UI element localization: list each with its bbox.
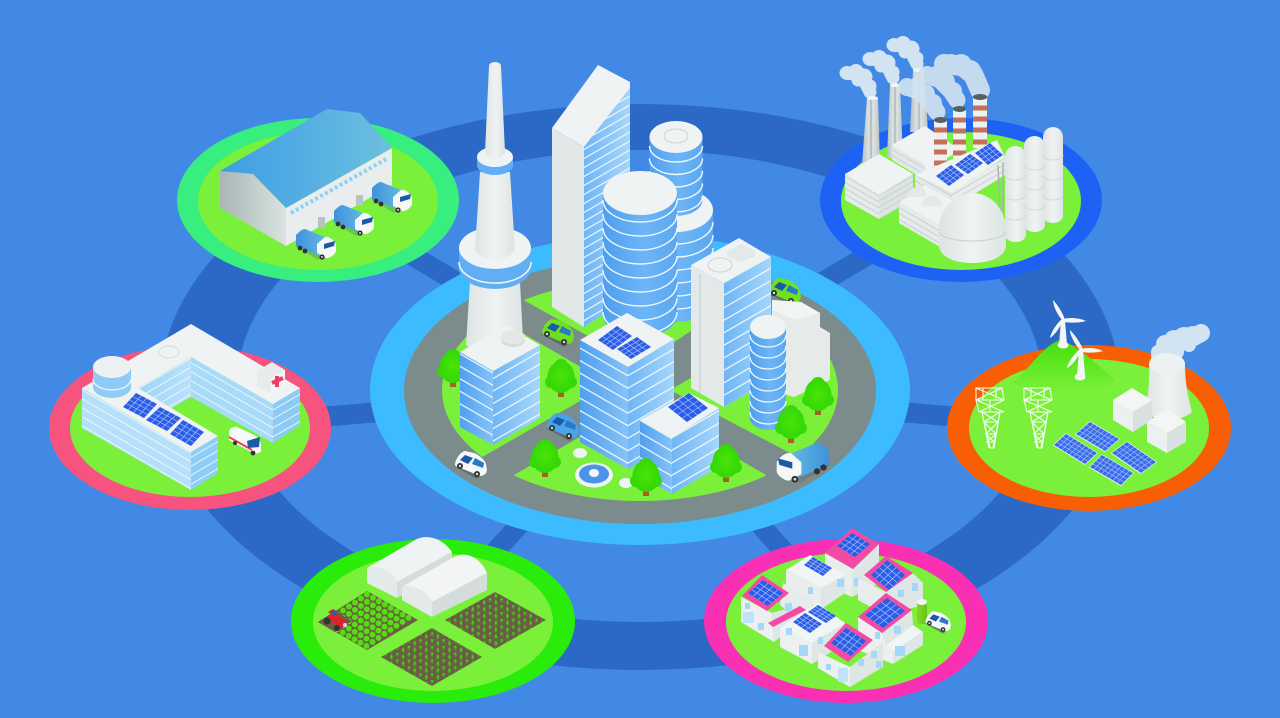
house: right middle with annex (858, 593, 923, 664)
greenhouses (367, 537, 487, 617)
green park sectors (442, 290, 838, 501)
house: front (818, 623, 883, 687)
white back building (770, 300, 830, 397)
wind turbines (1050, 300, 1103, 380)
house: left (741, 575, 815, 642)
panel: power plant (820, 36, 1102, 282)
solar array (1053, 421, 1157, 486)
transmission pylons (976, 388, 1052, 448)
panel: farm (291, 537, 575, 703)
fountain and stones (573, 448, 633, 488)
green car, road (541, 319, 575, 347)
gray chimneys (862, 68, 928, 164)
left block (845, 154, 913, 219)
lower block with domes (899, 185, 965, 247)
smoke plumes, back (840, 36, 924, 96)
stacked cylinder tower (639, 121, 713, 322)
large cylinder tower (603, 171, 677, 337)
rooftop tank (93, 356, 131, 398)
green hill (1013, 340, 1115, 394)
solar platform (915, 140, 1005, 212)
trees (529, 359, 834, 496)
central solar tower (580, 313, 674, 469)
house: center (780, 603, 845, 664)
crop fields (318, 591, 546, 686)
front solar building (640, 393, 719, 494)
panel: logistics warehouse (177, 109, 459, 282)
warehouse building (220, 109, 392, 246)
house: right (858, 556, 923, 615)
panel: central city (370, 62, 910, 545)
cooling tower smoke (1151, 326, 1209, 360)
delivery truck (777, 443, 830, 483)
ambulance (229, 427, 261, 455)
icon: red cross box (257, 362, 285, 393)
network ring and spokes (160, 104, 1120, 670)
panel: renewable energy (947, 300, 1231, 511)
office block, right (691, 238, 771, 407)
tree behind tower (437, 349, 469, 387)
house: back (825, 528, 879, 597)
back block (892, 126, 960, 180)
smoke from striped chimneys (898, 54, 986, 118)
slanted tower (552, 65, 630, 327)
blue car and white car (454, 413, 580, 479)
small cylinder tower (750, 315, 786, 430)
silos (1005, 127, 1063, 242)
house: flat roof back (786, 555, 845, 610)
observation tower (459, 62, 531, 370)
delivery trucks (295, 182, 412, 260)
blue block, left (460, 325, 540, 445)
reactor dome (939, 193, 1006, 263)
cooling tower (1145, 353, 1192, 420)
hospital building (82, 324, 300, 490)
EV charger and car (917, 599, 952, 634)
green car, top right (768, 278, 802, 306)
striped chimneys (934, 94, 987, 172)
panel: solar housing (704, 528, 988, 703)
tractor (324, 609, 347, 631)
panel: hospital (49, 324, 331, 510)
storage cubes (1113, 388, 1186, 453)
